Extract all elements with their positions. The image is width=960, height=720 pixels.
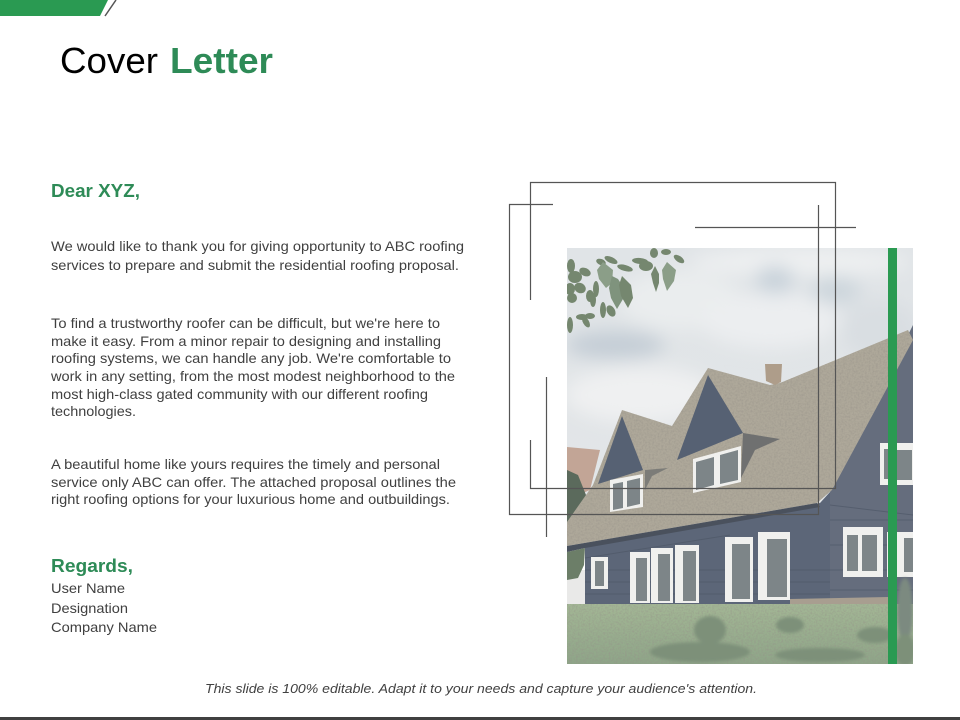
right gable wall	[830, 325, 913, 612]
stone base	[790, 597, 888, 604]
paragraph 1: services to prepare and submit the residential roofing proposal.	[51, 257, 459, 273]
weeds	[650, 578, 915, 666]
leaves	[565, 248, 686, 333]
sign-off	[51, 556, 157, 635]
title: Cover	[60, 40, 158, 81]
paragraph 2: most high-class gated community with our different roofing	[51, 386, 428, 402]
chimney	[765, 364, 782, 385]
paragraph 2: work in any setting, from the most modest neighborhood to the	[50, 368, 455, 384]
ground floor windows and doors	[591, 443, 913, 603]
sky	[567, 248, 913, 504]
background building and tree	[567, 447, 600, 492]
paragraph 2: roofing systems, we can handle any job. We're comfortable to	[51, 350, 451, 366]
paragraph 3: A beautiful home like yours requires the timely and personal	[51, 456, 440, 472]
outer frame	[530, 182, 836, 488]
paragraph 1	[51, 238, 464, 273]
inner frame	[510, 204, 818, 514]
salutation: Dear XYZ,	[51, 181, 140, 201]
sign-off: Regards,	[51, 556, 133, 576]
main wall	[585, 492, 830, 606]
green vertical bar	[888, 248, 897, 664]
crossing vertical line	[546, 377, 548, 537]
lawn	[567, 604, 913, 664]
top accent bar	[0, 0, 116, 16]
title: Letter	[170, 40, 273, 81]
decorative frame lines	[510, 182, 856, 537]
sign-off: User Name	[51, 580, 125, 596]
footer note: This slide is 100% editable. Adapt it to your needs and capture your audience's attention.	[205, 681, 757, 696]
paragraph 2: To find a trustworthy roofer can be difficult, but we're here to	[51, 315, 440, 331]
thatched roof	[567, 330, 913, 546]
paragraph 2: make it easy. From a minor repair to designing and installing	[51, 333, 441, 349]
house photo	[565, 248, 920, 666]
paragraph 3: service only ABC can offer. The attached proposal outlines the	[51, 474, 456, 490]
letter text block	[50, 181, 464, 635]
dormer 2	[677, 375, 780, 493]
paragraph 2: technologies.	[51, 403, 136, 419]
bottom bar	[0, 717, 960, 720]
paragraph 2	[50, 315, 455, 419]
dormer 1	[598, 416, 668, 512]
crossing horizontal line	[695, 226, 856, 228]
sign-off: Designation	[51, 600, 128, 616]
paragraph 3: right roofing options for your luxurious home and outbuildings.	[51, 491, 450, 507]
paragraph 1: We would like to thank you for giving opportunity to ABC roofing	[51, 238, 464, 254]
paragraph 3	[51, 456, 456, 507]
sign-off: Company Name	[51, 619, 157, 635]
